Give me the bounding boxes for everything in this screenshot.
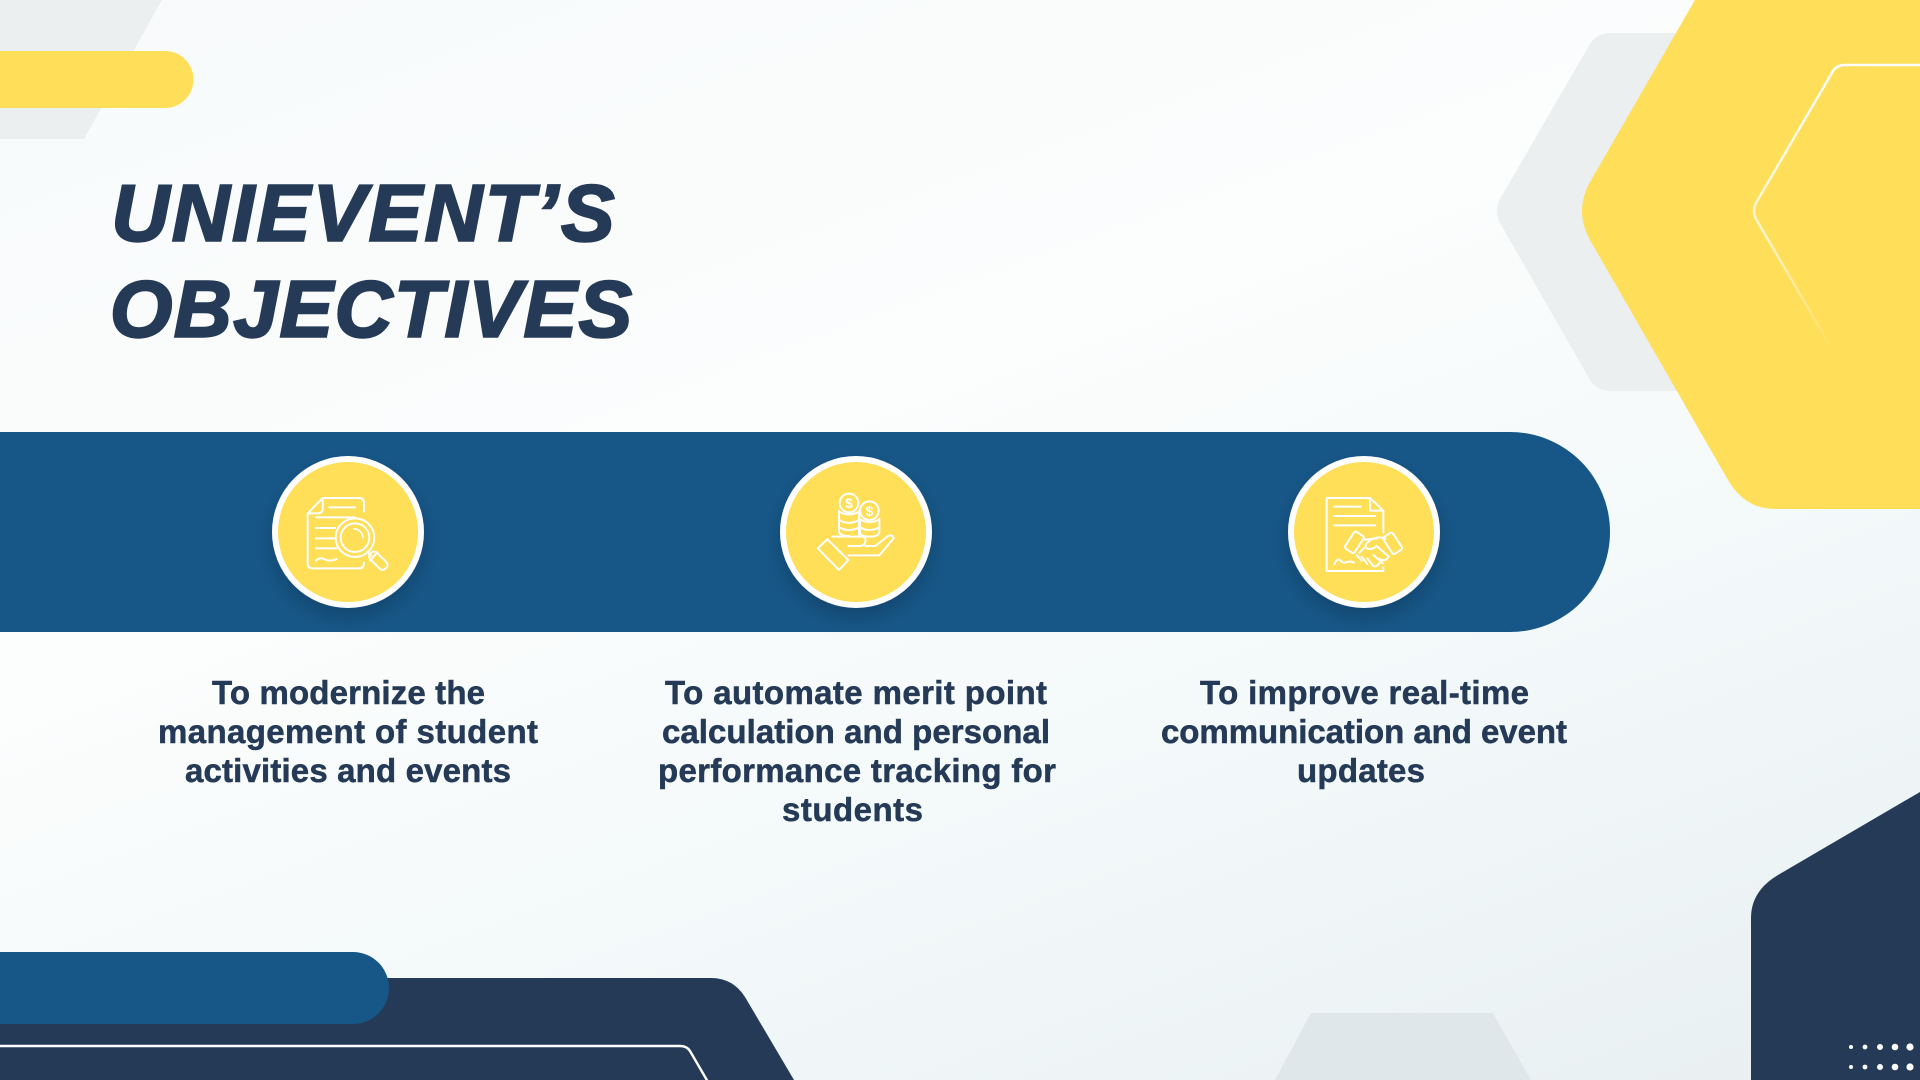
objective 1 icon: document and magnifier [275, 459, 421, 605]
title: UNIEVENT’S [112, 168, 614, 258]
top-left yellow pill [0, 51, 194, 108]
objective 3 text [1161, 674, 1567, 789]
objective 3 text: communication and event [1161, 713, 1567, 750]
top-right grey hexagon [1497, 33, 1800, 391]
bottom-left navy hexagon [0, 978, 794, 1080]
bottom-centre grey hexagon [1275, 1013, 1531, 1080]
objective 1 text: To modernize the [212, 674, 485, 711]
objective 2 text [658, 674, 1056, 828]
objective 2 icon: hand holding coins: $ [845, 495, 853, 511]
objective 1 text [158, 674, 538, 789]
objective 3 text: To improve real-time [1200, 674, 1529, 711]
blue band [0, 432, 1610, 632]
bottom-right navy hexagon [1751, 792, 1920, 1080]
top-left grey hexagon [0, 0, 162, 139]
objective 2 text: performance tracking for [658, 752, 1056, 789]
top-right hexagon outline [1754, 65, 1920, 359]
bottom-right dot grid [1849, 1043, 1914, 1071]
objective 3 text: updates [1297, 752, 1425, 789]
objective 1 text: activities and events [185, 752, 511, 789]
bottom-left blue pill [0, 952, 389, 1024]
objective 2 text: To automate merit point [665, 674, 1047, 711]
objective 2 text: calculation and personal [662, 713, 1050, 750]
top-right yellow hexagon [1582, 0, 1920, 509]
objective 2 icon: hand holding coins: $ [866, 503, 874, 519]
objective 3 icon: contract and handshake [1291, 459, 1437, 605]
objective 2 icon: hand holding coins [783, 459, 929, 605]
title: OBJECTIVES [110, 264, 632, 354]
title [110, 168, 632, 354]
objective 2 text: students [782, 791, 923, 828]
objective 1 text: management of student [158, 713, 538, 750]
bottom-left outline [0, 1046, 708, 1080]
